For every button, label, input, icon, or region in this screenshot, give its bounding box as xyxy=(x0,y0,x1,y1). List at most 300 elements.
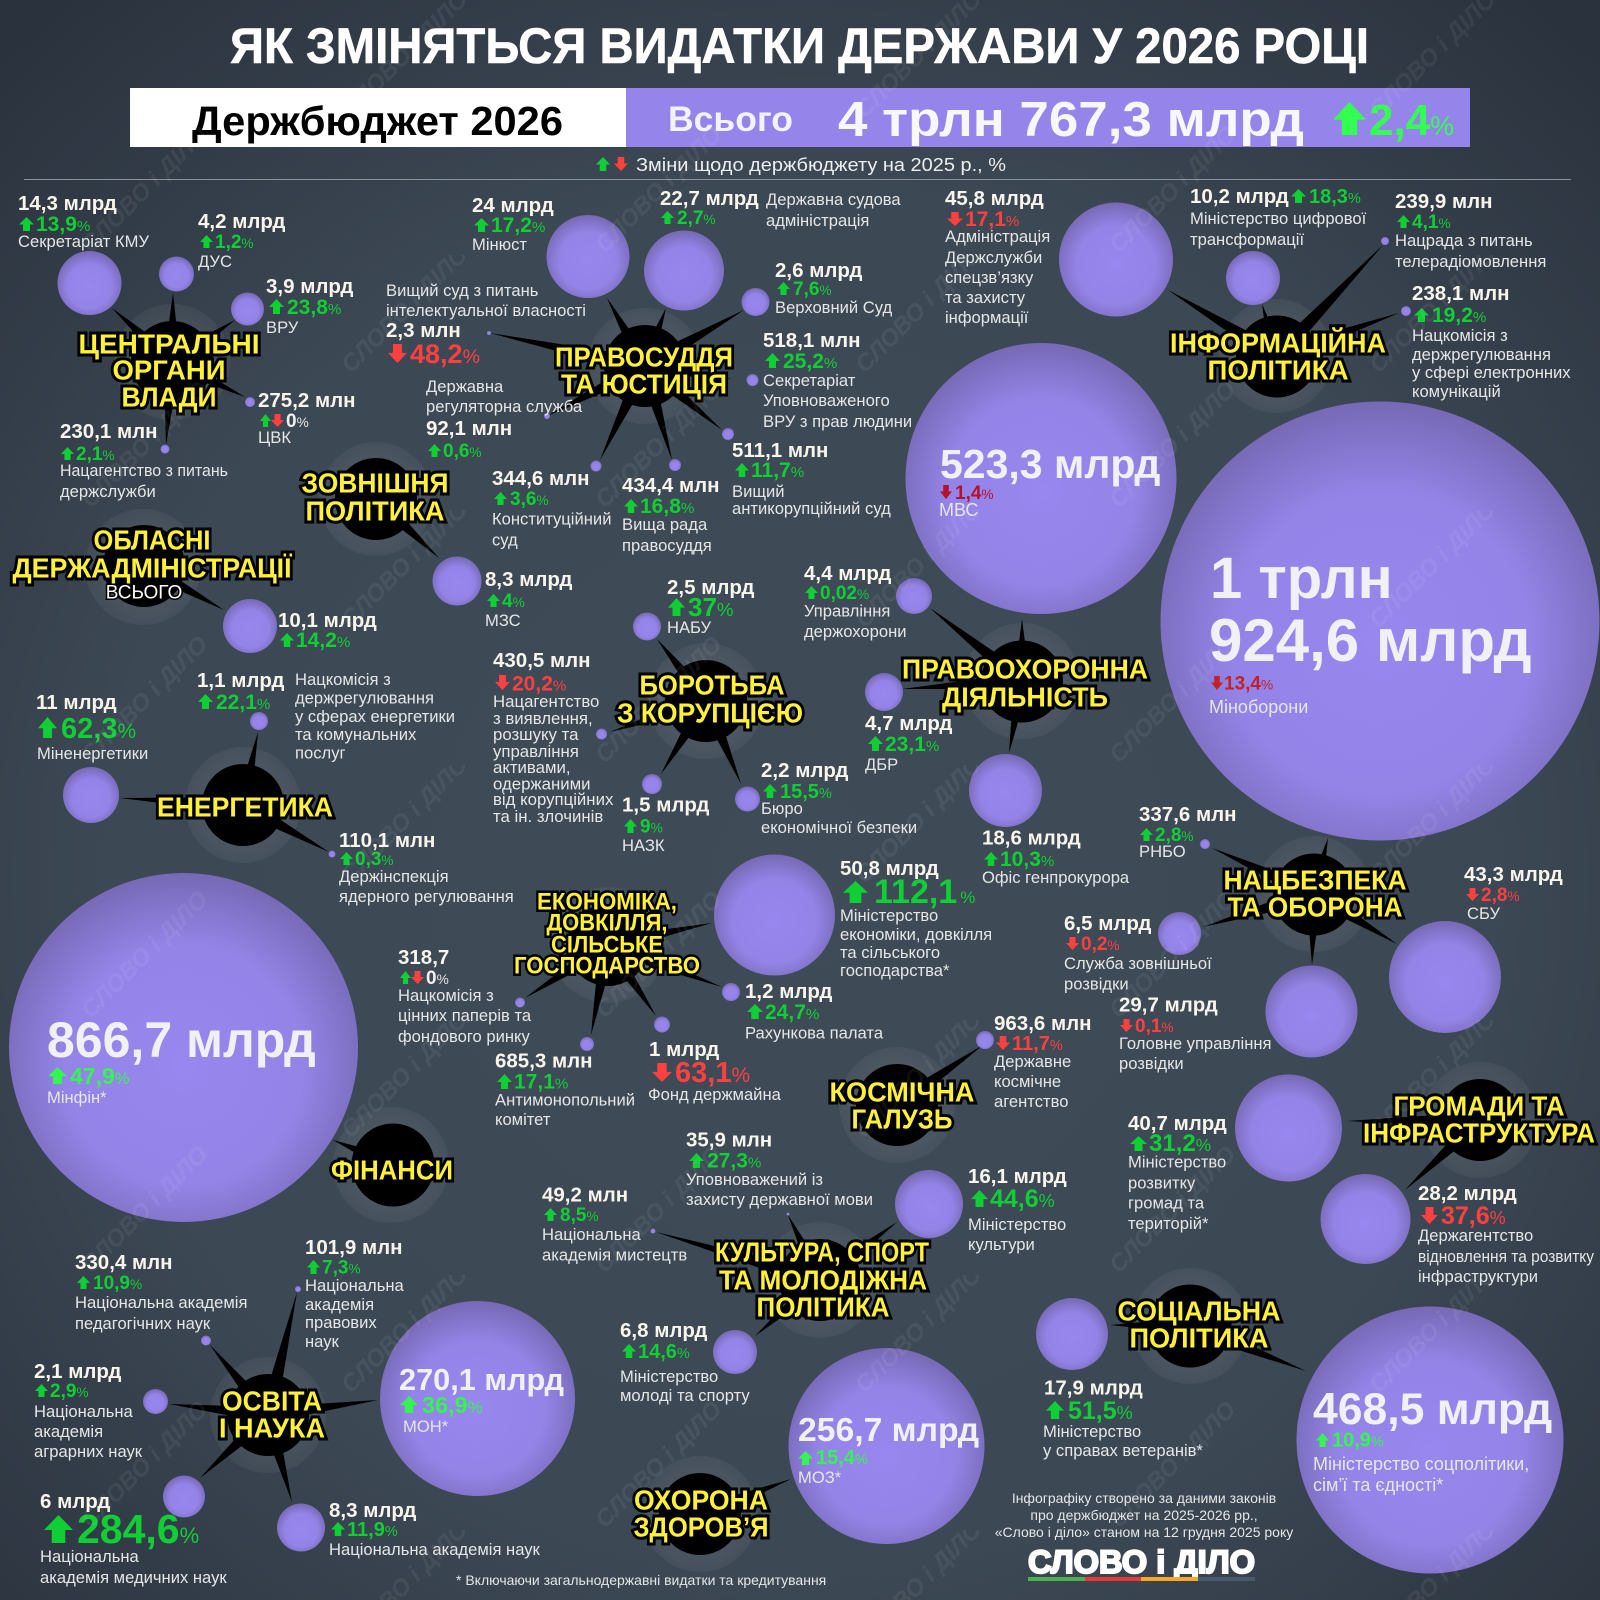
bubble: Держспецзв'язку: 45,8 млрд xyxy=(945,187,1044,210)
bubble: ДКА xyxy=(976,1012,1092,1111)
bubble: НАПН: 330,4 млн xyxy=(75,1251,173,1274)
bubble: ЦВК: ЦВК xyxy=(258,428,291,447)
panel: finance xyxy=(9,873,453,1223)
bubble: Держатомрегулювання: 110,1 млн xyxy=(339,829,435,852)
bubble: ВРУ: 3,9 млрд xyxy=(266,275,353,298)
label: КОСМІЧНА xyxy=(830,1076,974,1108)
bubble: БЕБ: 2,2 млрд xyxy=(761,759,848,782)
bubble: НКРЕКП: та комунальних xyxy=(295,725,417,744)
bubble: КСУ: 344,6 млн xyxy=(492,467,590,490)
bubble: НАМН: 284,6% xyxy=(77,1506,199,1552)
panel: information policy xyxy=(945,185,1571,413)
hub xyxy=(120,732,329,863)
panel: social policy xyxy=(1036,1268,1564,1574)
bubble: АРМА: від корупційних xyxy=(493,790,614,809)
bubble: Мінкультури: Міністерство xyxy=(968,1215,1066,1234)
bubble: РНБО: 337,6 млн xyxy=(1139,803,1237,826)
bubble: ДСА: Державна судова xyxy=(766,190,901,209)
bubble: ГУР: розвідки xyxy=(1119,1054,1184,1073)
bubble: ДРС: Державна xyxy=(426,377,504,396)
bubble: УДО xyxy=(804,562,932,641)
source note xyxy=(995,1490,1293,1540)
bubble: ОДА: 14,2% xyxy=(296,629,350,652)
bubble: Фонд держмайна: 63,1% xyxy=(675,1057,750,1089)
bubble: Мінфін: Мінфін* xyxy=(47,1088,107,1107)
hub xyxy=(85,509,224,625)
bubble: Мінцифри: 10,2 млрд xyxy=(1190,185,1289,208)
bubble: Верховний Суд xyxy=(742,259,893,317)
bubble: НАПрН: академія xyxy=(305,1295,374,1314)
bubble: Рахункова палата: 1,2 млрд xyxy=(745,980,832,1003)
bubble: НАБУ xyxy=(633,576,754,640)
bubble: Мінсоцполітики: 10,9% xyxy=(1332,1430,1384,1452)
bubble: Мінфін xyxy=(9,873,358,1222)
bubble: НАПрН xyxy=(295,1236,405,1351)
bubble: Мінсоцполітики: сім’ї та єдності* xyxy=(1313,1475,1443,1495)
bubble: ДУС: 4,2 млрд xyxy=(198,210,285,233)
label xyxy=(12,524,293,604)
bubble: Мінцифри xyxy=(1190,185,1367,305)
label: ПРАВООХОРОННА xyxy=(902,654,1148,684)
bubble: МОЗ: 15,4% xyxy=(816,1447,868,1469)
bubble: КСУ: Конституційний xyxy=(492,510,611,528)
bubble: ВСІВ xyxy=(386,281,586,369)
bubble: Мовний омбудсман: 35,9 млн xyxy=(686,1128,772,1152)
label: ПОЛІТИКА xyxy=(1130,1322,1268,1354)
bubble: Агентство відновлення: 28,2 млрд xyxy=(1418,1182,1517,1205)
bubble: ВРУ xyxy=(231,275,353,337)
bubble: НКЦПФР: 0% xyxy=(426,968,449,989)
bubble: ЦВК: 0% xyxy=(286,411,309,432)
bubble: НАПрН: 101,9 млн xyxy=(305,1236,403,1259)
label: ОСВІТА xyxy=(222,1386,322,1416)
bubble: НКЦПФР: 318,7 xyxy=(398,946,449,969)
label xyxy=(555,342,733,400)
bubble: ВАКС: Вищий xyxy=(732,482,785,501)
label: ФІНАНСИ xyxy=(331,1154,453,1186)
bubble: НААН: 2,1 млрд xyxy=(34,1360,121,1383)
bubble: НАМН xyxy=(40,1476,227,1587)
bubble: ДСА: 2,7% xyxy=(677,208,716,229)
bubble: АРМА: активами, xyxy=(493,758,571,777)
label xyxy=(830,1076,974,1134)
bubble: Міноборони: 1 трлн xyxy=(1210,546,1393,611)
bubble: Фонд держмайна xyxy=(648,1016,782,1104)
bubble: НКЕК: 238,1 млн xyxy=(1412,282,1510,305)
bubble: НКЦПФР: Нацкомісія з xyxy=(398,986,494,1005)
bubble: НАБУ: 2,5 млрд xyxy=(667,576,754,599)
bubble: ДУС: ДУС xyxy=(198,252,232,271)
bubble: ГУР: 29,7 млрд xyxy=(1119,994,1218,1016)
bubble: ВРП: 434,4 млн xyxy=(622,474,720,497)
label: ДІЯЛЬНІСТЬ xyxy=(942,682,1108,712)
hub xyxy=(656,1215,897,1338)
bubble: Держспецзв'язку: спецзв’язку xyxy=(945,268,1034,287)
bubble: НАБУ: НАБУ xyxy=(667,618,712,637)
label: СІЛЬСЬКЕ xyxy=(551,932,663,958)
label: ДОВКІЛЛЯ, xyxy=(546,910,668,936)
label xyxy=(1363,1090,1595,1148)
bubble: Академія мистецтв xyxy=(542,1184,687,1264)
bubble: НАПрН: Національна xyxy=(305,1276,405,1295)
bubble: ГУР xyxy=(1119,966,1358,1073)
bubble: Мінкультури: 44,6% xyxy=(990,1185,1055,1213)
panel: foreign policy xyxy=(302,442,572,630)
label: З КОРУПЦІЄЮ xyxy=(617,698,803,728)
hub xyxy=(169,1292,378,1502)
bubble: Мінкультури: культури xyxy=(968,1235,1035,1254)
bubble: Мінмолодьспорту: 14,6% xyxy=(638,1341,690,1363)
bubble: НКЕК xyxy=(1401,282,1571,401)
bubble: НАН: Національна академія наук xyxy=(329,1540,541,1559)
label: ПОЛІТИКА xyxy=(756,1292,890,1322)
bubble: ВСІВ: Вищий суд з питань xyxy=(386,281,538,300)
bubble: Академія мистецтв: академія мистецтв xyxy=(542,1246,687,1264)
bubble: Мінрозвитку: територій* xyxy=(1128,1214,1209,1233)
panel: space xyxy=(830,1012,1092,1163)
panel: justice xyxy=(386,187,912,555)
bubble: ВАКС xyxy=(722,428,891,518)
bubble: НКЕК: 19,2% xyxy=(1432,304,1486,327)
bubble: Міноборони xyxy=(1160,402,1600,840)
bubble: ДКА: агентство xyxy=(994,1092,1068,1111)
panel: law enforcement xyxy=(804,343,1176,887)
bubble: ДСА: адміністрація xyxy=(766,211,869,230)
bubble: ВСІВ: 48,2% xyxy=(410,339,480,369)
bubble: АРМА: та ін. злочинів xyxy=(493,807,603,826)
bubble: НАДС: 2,1% xyxy=(76,444,115,465)
label: ОРГАНИ xyxy=(112,354,226,386)
bubble: МЗС: 4% xyxy=(502,591,525,612)
bubble: РНБО xyxy=(1139,803,1237,861)
bubble: НКРЕКП: Нацкомісія з xyxy=(295,670,391,689)
bubble: Мінюст: 24 млрд xyxy=(472,194,554,217)
bubble: НАПН: 10,9% xyxy=(93,1273,142,1294)
panel: communities and infrastructure xyxy=(1128,1062,1595,1286)
bubble: Міненерго xyxy=(36,691,148,823)
bubble: Верховний Суд: 7,6% xyxy=(793,279,832,300)
bubble: Мінветеранів: Міністерство xyxy=(1043,1422,1141,1441)
bubble: Держатомрегулювання: Держінспекція xyxy=(339,867,449,886)
bubble: ГУР: 0,1% xyxy=(1135,1016,1174,1037)
bubble: ДКА: 11,7% xyxy=(1012,1033,1063,1055)
bubble: ДБР: 4,7 млрд xyxy=(865,712,952,735)
bubble: Мовний омбудсман: захисту державної мови xyxy=(686,1190,873,1209)
bubble: КСУ: суд xyxy=(492,530,518,550)
bubble: МЗС: 8,3 млрд xyxy=(485,568,572,591)
bubble: МОЗ xyxy=(788,1348,984,1544)
bubble: Рахункова палата xyxy=(722,980,884,1042)
bubble: Мінмолодьспорту: 6,8 млрд xyxy=(620,1319,707,1342)
bubble: НАЗК: НАЗК xyxy=(622,836,665,855)
source note: «Слово і діло» станом на 12 грудня 2025 року xyxy=(995,1524,1293,1540)
hub xyxy=(333,1107,449,1223)
bubble: БЕБ: економічної безпеки xyxy=(761,818,917,837)
hub xyxy=(610,639,764,784)
label: ОБЛАСНІ xyxy=(94,524,210,556)
panel: budget header: 2,4% xyxy=(1369,96,1454,145)
bubble: НКЕК: держрегулювання xyxy=(1412,345,1551,364)
label: СОЦІАЛЬНА xyxy=(1118,1296,1280,1326)
bubble: Міненерго: 62,3% xyxy=(61,713,136,745)
label: ПОЛІТИКА xyxy=(1208,354,1348,386)
hub xyxy=(490,298,744,460)
label: НАЦБЕЗПЕКА xyxy=(1224,864,1406,896)
bubble: Мінфін: 866,7 млрд xyxy=(47,1012,316,1068)
panel: budget header: 4 трлн 767,3 млрд xyxy=(838,93,1304,147)
label: ЗОВНІШНЯ xyxy=(302,468,448,498)
bubble: СЗР: Служба зовнішньої xyxy=(1064,954,1212,973)
bubble: Мінрозвитку: 40,7 млрд xyxy=(1128,1112,1227,1135)
bubble: ДУС xyxy=(159,210,285,292)
bubble: Академія мистецтв: 49,2 млн xyxy=(542,1184,628,1206)
bubble: Агентство відновлення xyxy=(1320,1174,1595,1286)
bubble: ДБР xyxy=(865,673,952,774)
bubble: Міноборони: 13,4% xyxy=(1224,674,1273,694)
bubble: Академія мистецтв: 8,5% xyxy=(560,1205,599,1226)
bubble: Фонд держмайна: Фонд держмайна xyxy=(648,1085,782,1104)
bubble: БЕБ: 15,5% xyxy=(780,781,832,803)
bubble: БЕБ: Бюро xyxy=(761,799,803,818)
bubble: Мінекономіки: та сільського xyxy=(840,943,940,962)
bubble: Міноборони: 924,6 млрд xyxy=(1209,607,1532,674)
label xyxy=(1170,326,1386,386)
bubble: НКРЕКП: у сферах енергетики xyxy=(295,707,455,726)
bubble: НАПН: Національна академія xyxy=(75,1293,247,1312)
bubble: Мінветеранів: у справах ветеранів* xyxy=(1043,1441,1203,1460)
bubble: НКРЕКП: 1,1 млрд xyxy=(197,669,284,692)
bubble: Міноборони: Міноборони xyxy=(1209,697,1308,717)
bubble: УДО: 4,4 млрд xyxy=(804,562,891,585)
panel: budget header xyxy=(130,88,1470,147)
bubble: Мовний омбудсман: 27,3% xyxy=(707,1150,761,1172)
label: ГРОМАДИ ТА xyxy=(1394,1090,1564,1122)
source note: про держбюджет на 2025-2026 рр., xyxy=(1030,1507,1258,1523)
bubble: Академія мистецтв: Національна xyxy=(542,1225,642,1244)
bubble: АРМА: розшуку та xyxy=(493,725,579,744)
hub xyxy=(839,1045,983,1163)
bubble: Держатомрегулювання xyxy=(328,829,514,906)
bubble: НАЗК: 9% xyxy=(640,816,663,838)
bubble: УДО: держохорони xyxy=(804,622,907,641)
bubble: Омбудсман xyxy=(746,329,912,431)
bubble: Держспецзв'язку: Держслужби xyxy=(945,248,1042,267)
bubble: Мінюст: 17,2% xyxy=(491,214,545,237)
label xyxy=(617,670,803,728)
bubble: Мінюст: Мінюст xyxy=(472,235,527,254)
bubble: ДРС: 0,6% xyxy=(443,441,482,462)
panel: energy xyxy=(36,669,514,906)
bubble: ВСІВ: 2,3 млн xyxy=(386,319,461,342)
bubble: ВАКС: 511,1 млн xyxy=(732,439,828,462)
bubble: Мовний омбудсман xyxy=(686,1128,873,1216)
bubble: Мінекономіки xyxy=(714,854,992,980)
panel: central authorities xyxy=(18,192,356,501)
label: КУЛЬТУРА, СПОРТ xyxy=(715,1236,929,1268)
bubble: Агентство відновлення: інфраструктури xyxy=(1418,1267,1538,1286)
label xyxy=(302,468,448,526)
hub xyxy=(112,293,245,445)
label: І НАУКА xyxy=(219,1412,325,1444)
bubble: Міненерго: 11 млрд xyxy=(36,691,117,714)
bubble: ВРУ: ВРУ xyxy=(266,318,299,337)
bubble: КСУ xyxy=(492,460,611,550)
bubble: МВС: 1,4% xyxy=(955,483,994,504)
bubble: КМУ xyxy=(18,192,149,315)
logo: СЛОВО і ДІЛО xyxy=(1028,1544,1255,1580)
bubble: Омбудсман: ВРУ з прав людини xyxy=(763,412,912,431)
bubble: НАМН: Національна xyxy=(40,1547,140,1566)
bubble: НКРЕКП: держрегулювання xyxy=(295,688,434,708)
bubble: Держспецзв'язку xyxy=(945,187,1173,327)
bubble: СБУ: 43,3 млрд xyxy=(1464,863,1563,886)
bubble: Омбудсман: 518,1 млн xyxy=(763,329,861,352)
bubble: АРМА: з виявлення, xyxy=(493,709,593,728)
bubble: ВАКС: 11,7% xyxy=(751,459,804,482)
bubble: ДКА: Державне xyxy=(994,1052,1071,1071)
bubble: Мінекономіки: економіки, довкілля xyxy=(840,925,992,944)
bubble: АМКУ: 685,3 млн xyxy=(495,1050,593,1072)
panel: regional administrations xyxy=(12,509,377,653)
bubble: НАДС: 230,1 млн xyxy=(60,420,158,443)
bubble: Держспецзв'язку: та захисту xyxy=(945,288,1026,307)
bubble: Омбудсман: 25,2% xyxy=(783,350,837,373)
bubble: МВС xyxy=(906,343,1176,614)
label xyxy=(1118,1296,1280,1354)
bubble: АМКУ xyxy=(495,1037,635,1129)
bubble: НКЕК: Нацкомісія з xyxy=(1412,326,1508,345)
label: ГАЛУЗЬ xyxy=(852,1104,952,1134)
bubble: Міненерго: Міненергетики xyxy=(37,744,148,763)
bubble: НКЕК: у сфері електронних xyxy=(1412,363,1571,382)
bubble: КСУ: 3,6% xyxy=(510,489,549,510)
bubble: СЗР: 0,2% xyxy=(1081,934,1120,955)
hub xyxy=(1203,836,1397,965)
bubble: ДБР: ДБР xyxy=(865,755,898,774)
bubble: НАЗК xyxy=(622,774,709,855)
label: ТА ОБОРОНА xyxy=(1228,892,1402,922)
bubble: ДРС: 92,1 млн xyxy=(426,417,512,440)
bubble: НАПрН: 7,3% xyxy=(322,1258,361,1278)
bubble: НКРЕКП xyxy=(197,669,455,762)
bubble: Мінсоцполітики xyxy=(1296,1306,1564,1574)
bubble: Нацрада: Нацрада з питань xyxy=(1395,231,1533,250)
bubble: Мінцифри: трансформації xyxy=(1190,230,1304,249)
bubble: Мінкультури: 16,1 млрд xyxy=(968,1165,1067,1188)
label: ТА ЮСТИЦІЯ xyxy=(561,368,727,400)
bubble: НАМН: академія медичних наук xyxy=(40,1568,227,1587)
bubble: Омбудсман: Уповноваженого xyxy=(763,391,890,410)
label: ВСЬОГО xyxy=(106,582,182,604)
bubble: СБУ: 2,8% xyxy=(1481,885,1520,906)
bubble: Мінмолодьспорту: Міністерство xyxy=(620,1367,718,1386)
bubble: АРМА: 20,2% xyxy=(512,672,566,696)
footnote: * Включаючи загальнодержавні видатки та кредитування xyxy=(456,1572,826,1588)
bubble: НКЦПФР xyxy=(398,946,532,1046)
panel: budget header: Всього xyxy=(668,100,793,139)
bubble: Мінрозвитку: Міністерство xyxy=(1128,1152,1226,1172)
panel: defence xyxy=(1064,402,1600,1073)
bubble: МОЗ: МОЗ* xyxy=(798,1468,842,1487)
label: ІНФОРМАЦІЙНА xyxy=(1170,326,1386,358)
hub xyxy=(1347,1062,1538,1190)
bubble: Мовний омбудсман: Уповноважений із xyxy=(686,1170,823,1189)
bubble: МВС: 523,3 млрд xyxy=(940,441,1160,487)
bubble: Мінрозвитку: громад та xyxy=(1128,1194,1205,1212)
legend: Зміни щодо держбюджету на 2025 р., % xyxy=(636,154,1006,175)
panel: anti-corruption xyxy=(493,576,917,855)
bubble: Держспецзв'язку: інформації xyxy=(945,308,1029,327)
bubble: Мінветеранів xyxy=(1036,1298,1203,1460)
bubble: МЗС xyxy=(432,556,572,630)
bubble: ОДА: 10,1 млрд xyxy=(278,609,377,632)
bubble: Агентство відновлення: Держагентство xyxy=(1418,1226,1533,1245)
bubble: НААН: академія xyxy=(34,1422,103,1441)
bubble: Фонд держмайна: 1 млрд xyxy=(649,1038,719,1061)
bubble: Омбудсман: Секретаріат xyxy=(763,371,856,390)
bubble: ДУС: 1,2% xyxy=(215,232,254,253)
bubble: ДБР: 23,1% xyxy=(885,733,939,756)
bubble: ДРС xyxy=(426,377,583,462)
bubble: НААН xyxy=(34,1360,168,1461)
bubble: НАПрН: наук xyxy=(305,1332,340,1351)
bubble: Рахункова палата: 24,7% xyxy=(765,1001,819,1024)
title: ЯК ЗМІНЯТЬСЯ ВИДАТКИ ДЕРЖАВИ У 2026 РОЦІ xyxy=(230,18,1369,74)
label: ПОЛІТИКА xyxy=(306,496,444,526)
bubble: АРМА: управління xyxy=(493,742,579,761)
bubble: Мінсоцполітики: Міністерство соцполітики, xyxy=(1313,1454,1529,1474)
panel: economy xyxy=(398,854,992,1129)
bubble: Держспецзв'язку: Адміністрація xyxy=(945,227,1050,246)
bubble: НАЗК: 1,5 млрд xyxy=(622,794,709,816)
bubble: НАН: 8,3 млрд xyxy=(329,1499,416,1522)
bubble: НАДС: Нацагентство з питань xyxy=(60,461,228,480)
label xyxy=(514,888,700,980)
bubble: БЕБ xyxy=(735,759,917,837)
bubble: Держатомрегулювання: 0,3% xyxy=(355,849,394,870)
bubble: Мінекономіки: Міністерство xyxy=(840,906,938,925)
bubble: Мінфін: 47,9% xyxy=(70,1063,130,1089)
bubble: Мінекономіки: 112,1% xyxy=(874,873,975,911)
bubble: Мінветеранів: 51,5% xyxy=(1068,1397,1133,1425)
bubble: НАН: 11,9% xyxy=(347,1519,398,1541)
bubble: ВРП: 16,8% xyxy=(640,495,694,518)
panel: education and science xyxy=(34,1236,575,1587)
bubble: АРМА: Нацагентство xyxy=(493,692,599,711)
label: ДЕРЖАДМІНІСТРАЦІЇ xyxy=(12,552,293,584)
hub xyxy=(1168,245,1399,413)
bubble: УДО: 0,02% xyxy=(820,583,869,604)
bubble: Нацрада: 239,9 млн xyxy=(1395,190,1493,213)
bubble: АРМА: одержаними xyxy=(493,774,591,794)
bubble: ДКА: космічне xyxy=(994,1072,1061,1091)
bubble: ВСІВ: інтелектуальної власності xyxy=(386,301,586,320)
label xyxy=(219,1386,325,1444)
bubble: НКЕК: комунікацій xyxy=(1412,382,1501,401)
bubble: ДКА: 963,6 млн xyxy=(994,1012,1092,1035)
label: ЕНЕРГЕТИКА xyxy=(157,792,333,822)
bubble: Мінрозвитку: розвитку xyxy=(1128,1174,1196,1192)
bubble: Держспецзв'язку: 17,1% xyxy=(965,208,1019,231)
bubble: Верховний Суд: Верховний Суд xyxy=(775,298,893,317)
label: ОХОРОНА xyxy=(634,1484,768,1516)
bubble: Мінмолодьспорту: молоді та спорту xyxy=(620,1386,750,1405)
bubble: Мінмолодьспорту xyxy=(620,1319,757,1405)
panel: culture xyxy=(542,1128,1067,1405)
bubble: НАДС: держслужби xyxy=(60,482,156,501)
bubble: Офіс генпрокурора: 18,6 млрд xyxy=(982,826,1081,850)
bubble: АРМА: 430,5 млн xyxy=(493,649,591,672)
